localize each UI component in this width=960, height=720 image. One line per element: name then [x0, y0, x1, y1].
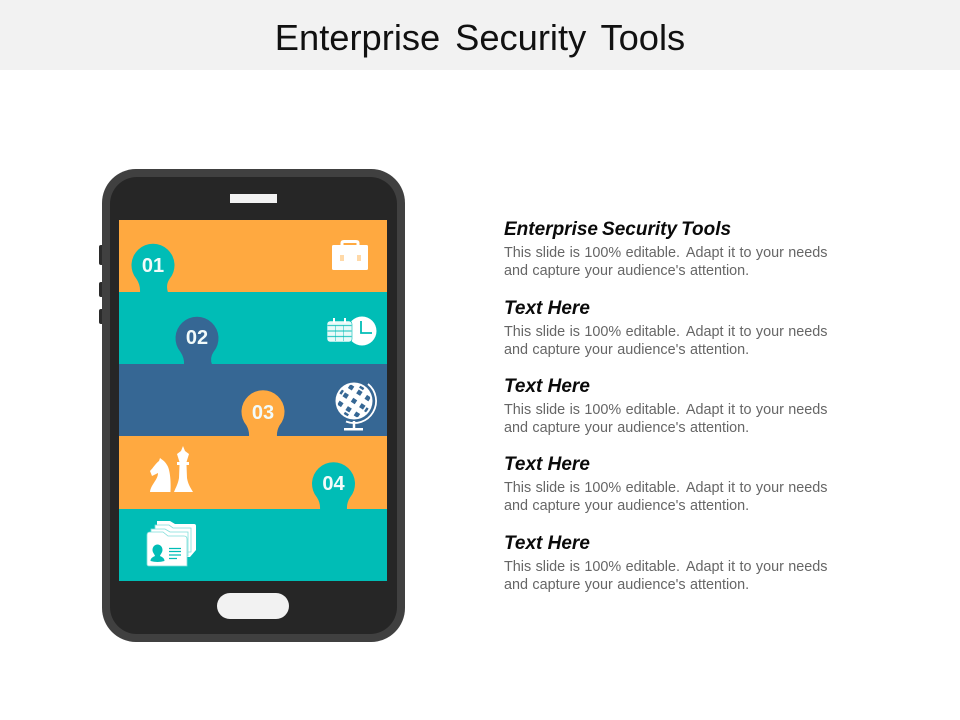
pin 01: 01: [142, 255, 164, 277]
text block 5: [504, 533, 828, 593]
pin 01: [132, 244, 174, 292]
text block 1: and capture your audience's attention.: [504, 263, 749, 279]
text block 4: This slide is 100% editable. Adapt it to your needs: [504, 480, 828, 496]
icon: globe: [333, 380, 376, 430]
text block 2: [504, 298, 828, 358]
pin 02: 02: [186, 327, 208, 349]
icon: briefcase: [332, 242, 368, 270]
band 3: [119, 364, 387, 436]
home button: [217, 593, 289, 619]
text block 4: [504, 454, 828, 514]
pin 03: 03: [252, 402, 274, 424]
text block 2: and capture your audience's attention.: [504, 342, 749, 358]
text block 2: This slide is 100% editable. Adapt it to your needs: [504, 324, 828, 340]
icon: ID card folders: [147, 521, 196, 566]
side buttons: [99, 245, 105, 324]
pin 04: [312, 462, 355, 510]
text block 4: Text Here: [504, 454, 590, 475]
text block 1: [504, 219, 828, 279]
pin 03: [242, 390, 284, 436]
speaker: [230, 194, 277, 203]
text block 1: Enterprise Security Tools: [504, 219, 731, 240]
pin 04: 04: [322, 473, 345, 495]
text block 4: and capture your audience's attention.: [504, 498, 749, 514]
band 1: [119, 220, 387, 292]
pin 02: [176, 317, 219, 364]
title banner: [0, 0, 960, 70]
icon: chess pieces: [150, 446, 193, 492]
smartphone illustration: [99, 169, 405, 642]
phone bezel: [110, 177, 397, 634]
text block 2: Text Here: [504, 298, 590, 319]
title: Enterprise Security Tools: [275, 17, 685, 58]
text block 3: This slide is 100% editable. Adapt it to your needs: [504, 402, 828, 418]
icon: calendar and clock: [327, 316, 376, 346]
text block 5: This slide is 100% editable. Adapt it to your needs: [504, 559, 828, 575]
text block 5: and capture your audience's attention.: [504, 577, 749, 593]
text block 3: [504, 376, 828, 436]
text block 3: and capture your audience's attention.: [504, 420, 749, 436]
text block 3: Text Here: [504, 376, 590, 397]
text block 5: Text Here: [504, 533, 590, 554]
text block 1: This slide is 100% editable. Adapt it to your needs: [504, 245, 828, 261]
band 5: [119, 509, 387, 581]
phone body: [102, 169, 405, 642]
band 2: [119, 292, 387, 364]
band 4: [119, 436, 387, 509]
